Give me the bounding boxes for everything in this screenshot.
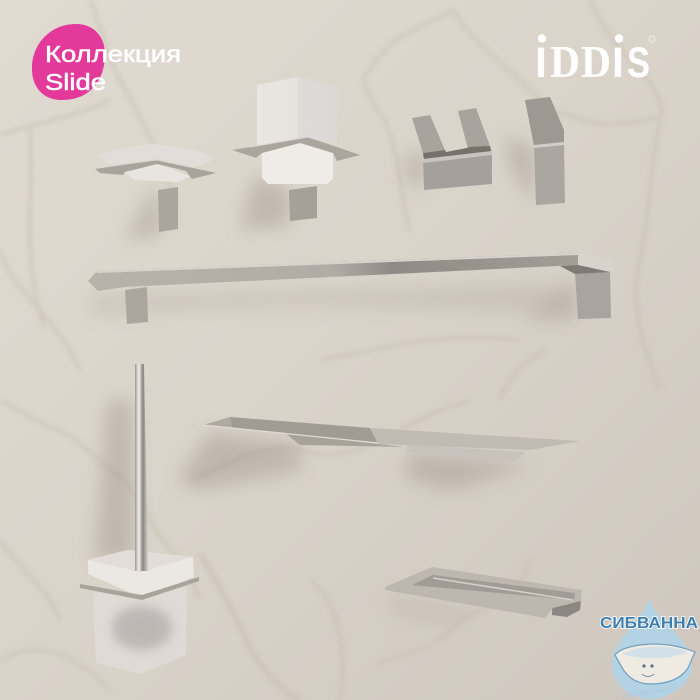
towel ring holder: [385, 567, 582, 618]
face: [642, 664, 654, 676]
bathtub: [615, 644, 695, 684]
shelf: [203, 417, 580, 461]
left bracket: [125, 287, 148, 324]
double hook: [412, 108, 492, 190]
url: www.sibvanna.ru: [620, 686, 675, 700]
right bracket: [575, 272, 611, 319]
soap dish: [95, 144, 216, 232]
pink blob: [32, 24, 105, 100]
watermark logo: Sibvanna: [600, 597, 698, 700]
handle: [135, 364, 148, 571]
tumbler holder: [232, 77, 360, 221]
title text: Коллекция: [45, 41, 181, 67]
icon: iDDiS logo: [535, 34, 655, 87]
title text: Slide: [45, 69, 106, 95]
icon: iDDiS logo: S: [627, 39, 650, 87]
brand name: СИБВАННА: [600, 615, 698, 632]
glass: [93, 587, 187, 674]
icon: iDDiS logo: DD: [550, 36, 611, 87]
wall shadows: [90, 135, 578, 625]
white cap: [88, 550, 194, 598]
icon: iDDiS logo: I: [612, 39, 624, 87]
water drop: [612, 597, 692, 699]
icon: iDDiS logo: I: [535, 39, 547, 87]
single hook: [525, 97, 565, 205]
heading: collection badge: [32, 24, 181, 100]
basin: [622, 647, 688, 658]
plate: [80, 577, 199, 600]
towel bar: [88, 253, 613, 324]
toilet brush: [80, 364, 199, 674]
